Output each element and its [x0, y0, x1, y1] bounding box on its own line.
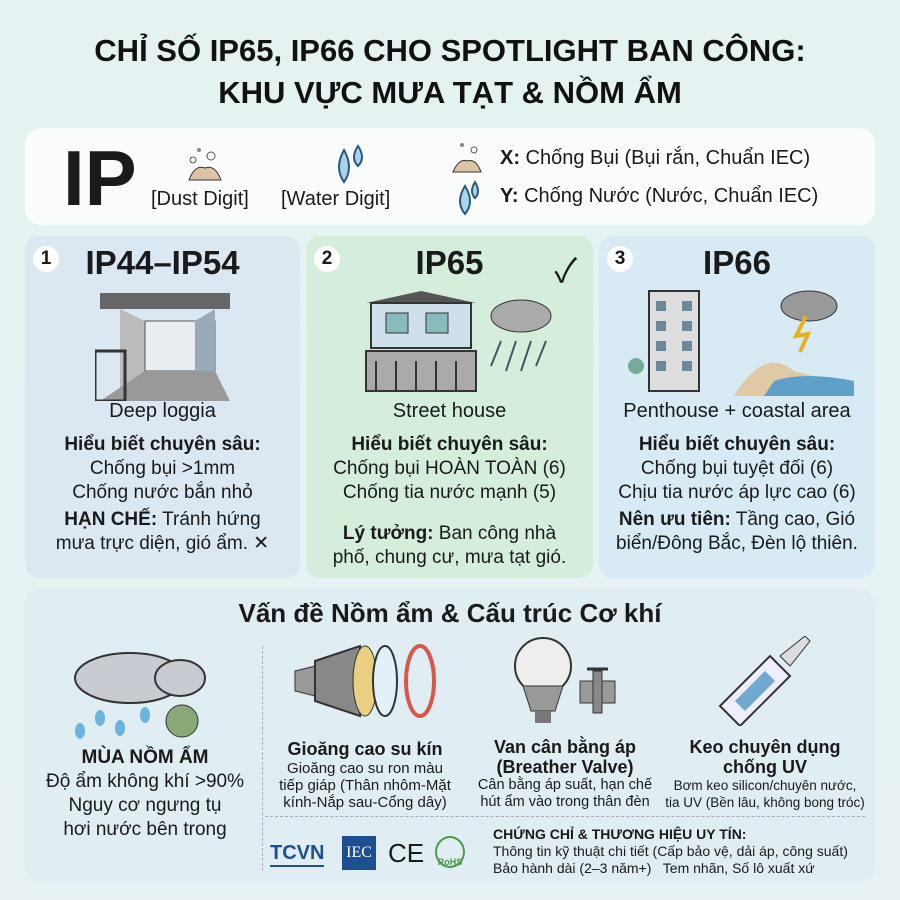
humid season text: Nguy cơ ngưng tụ	[68, 795, 221, 816]
item: breather valve: hút ẩm vào trong thân đèn	[480, 794, 650, 810]
insight text: Chống bụi >1mm	[90, 458, 235, 479]
panel: card 1 IP44-IP54	[25, 236, 300, 578]
title	[94, 33, 806, 110]
divider	[262, 646, 263, 871]
panel: card 1 IP44-IP54: 1	[41, 248, 51, 269]
card 2 title	[416, 244, 578, 289]
icon: dust	[188, 148, 222, 180]
insight text: Chống bụi tuyệt đối (6)	[641, 458, 833, 479]
item: UV sealant: chống UV	[723, 757, 807, 777]
insight text	[64, 434, 261, 503]
icon: water	[338, 144, 363, 184]
insight text	[333, 434, 566, 503]
item: UV sealant: Bơm keo silicon/chuyên nước,	[674, 778, 856, 793]
title: CHỈ SỐ IP65, IP66 CHO SPOTLIGHT BAN CÔNG:	[94, 33, 806, 68]
dust label: [Dust Digit]	[151, 188, 249, 210]
certification logos: TCVN	[270, 842, 324, 864]
item: gasket: kính-Nắp sau-Cổng dây)	[283, 794, 447, 811]
icon: sealant tube	[718, 636, 811, 726]
item: breather valve: Cân bằng áp suất, hạn chế	[478, 777, 652, 793]
card 3 title: IP66	[703, 244, 771, 281]
caption: Penthouse + coastal area	[623, 400, 851, 422]
ideal use: phố, chung cư, mưa tạt gió.	[333, 547, 566, 568]
certification text: CHỨNG CHỈ & THƯƠNG HIỆU UY TÍN:	[493, 826, 746, 842]
priority: Nên ưu tiên: Tầng cao, Gió	[619, 509, 855, 530]
humid season text	[46, 746, 244, 840]
limitation: mưa trực diện, gió ẩm. ✕	[56, 533, 269, 554]
icon: bulb and valve	[514, 637, 616, 723]
item: breather valve	[478, 637, 652, 810]
panel: card 3 IP66: 3	[615, 248, 625, 269]
caption: Deep loggia	[109, 400, 216, 422]
panel: card 3 IP66	[599, 236, 875, 578]
insight text	[618, 434, 856, 503]
icon: penthouse + storm	[628, 290, 854, 396]
certification text	[493, 826, 848, 876]
item: gasket	[279, 644, 451, 811]
humid season text: Độ ẩm không khí >90%	[46, 771, 244, 792]
humid season text: MÙA NỒM ẨM	[82, 747, 208, 768]
insight text: Chống nước bắn nhỏ	[72, 482, 253, 503]
item: gasket: Gioăng cao su kín	[287, 739, 443, 759]
certification logos: RoHS	[438, 857, 462, 867]
certification logos: CE	[388, 838, 424, 868]
panel: humidity & mechanical structure	[25, 588, 875, 882]
panel: card 2 IP65	[306, 236, 593, 578]
water label: [Water Digit]	[281, 188, 390, 210]
item: UV sealant: Keo chuyên dụng	[689, 737, 840, 757]
insight text: Hiểu biết chuyên sâu:	[639, 434, 835, 455]
insight text: Chống bụi HOÀN TOÀN (6)	[333, 458, 566, 479]
card 2 title: IP65	[416, 244, 483, 281]
IP big text: IP	[63, 134, 137, 222]
section heading: Vấn đề Nồm ẩm & Cấu trúc Cơ khí	[238, 598, 662, 628]
card 1 title: IP44–IP54	[85, 244, 240, 281]
item: breather valve: Van cân bằng áp	[494, 737, 636, 757]
panel: IP legend	[25, 128, 875, 225]
item: breather valve: (Breather Valve)	[496, 757, 634, 777]
card 2 title: ✓	[554, 252, 577, 289]
insight text: Chống tia nước mạnh (5)	[343, 482, 556, 503]
insight text: Hiểu biết chuyên sâu:	[351, 434, 548, 455]
certification logos: IEC	[346, 844, 372, 861]
title: KHU VỰC MƯA TẠT & NỒM ẨM	[218, 75, 682, 110]
X legend: X: Chống Bụi (Bụi rắn, Chuẩn IEC)	[500, 147, 810, 169]
icon: rain cloud	[74, 652, 206, 739]
certification text: Bảo hành dài (2–3 năm+) Tem nhãn, Số lô xuất xứ	[493, 860, 815, 876]
icon: dust small	[452, 143, 482, 172]
ideal use	[333, 523, 566, 568]
certification text: Thông tin kỹ thuật chi tiết (Cấp bảo vệ, dải áp, công suất)	[493, 843, 848, 859]
item: UV sealant	[665, 636, 865, 810]
caption: Street house	[393, 400, 506, 422]
ideal use: Lý tưởng: Ban công nhà	[343, 523, 556, 544]
divider	[265, 816, 865, 817]
insight text: Hiểu biết chuyên sâu:	[64, 434, 261, 455]
icon: gasket	[294, 644, 436, 718]
item: gasket: Gioăng cao su ron màu	[287, 760, 443, 777]
priority	[616, 509, 858, 554]
limitation	[56, 508, 269, 554]
panel: card 2 IP65: 2	[322, 248, 332, 269]
item: gasket: tiếp giáp (Thân nhôm-Mặt	[279, 777, 451, 794]
icon: loggia	[95, 293, 230, 401]
insight text: Chịu tia nước áp lực cao (6)	[618, 482, 856, 503]
humid season text: hơi nước bên trong	[63, 819, 227, 840]
limitation: HẠN CHẾ: Tránh hứng	[64, 509, 261, 530]
priority: biển/Đông Bắc, Đèn lộ thiên.	[616, 533, 858, 554]
icon: street house with rain	[365, 291, 552, 392]
certification logos	[270, 836, 465, 870]
icon: water small	[459, 180, 479, 216]
Y legend: Y: Chống Nước (Nước, Chuẩn IEC)	[500, 185, 818, 207]
item: UV sealant: tia UV (Bền lâu, không bong tróc)	[665, 795, 865, 810]
